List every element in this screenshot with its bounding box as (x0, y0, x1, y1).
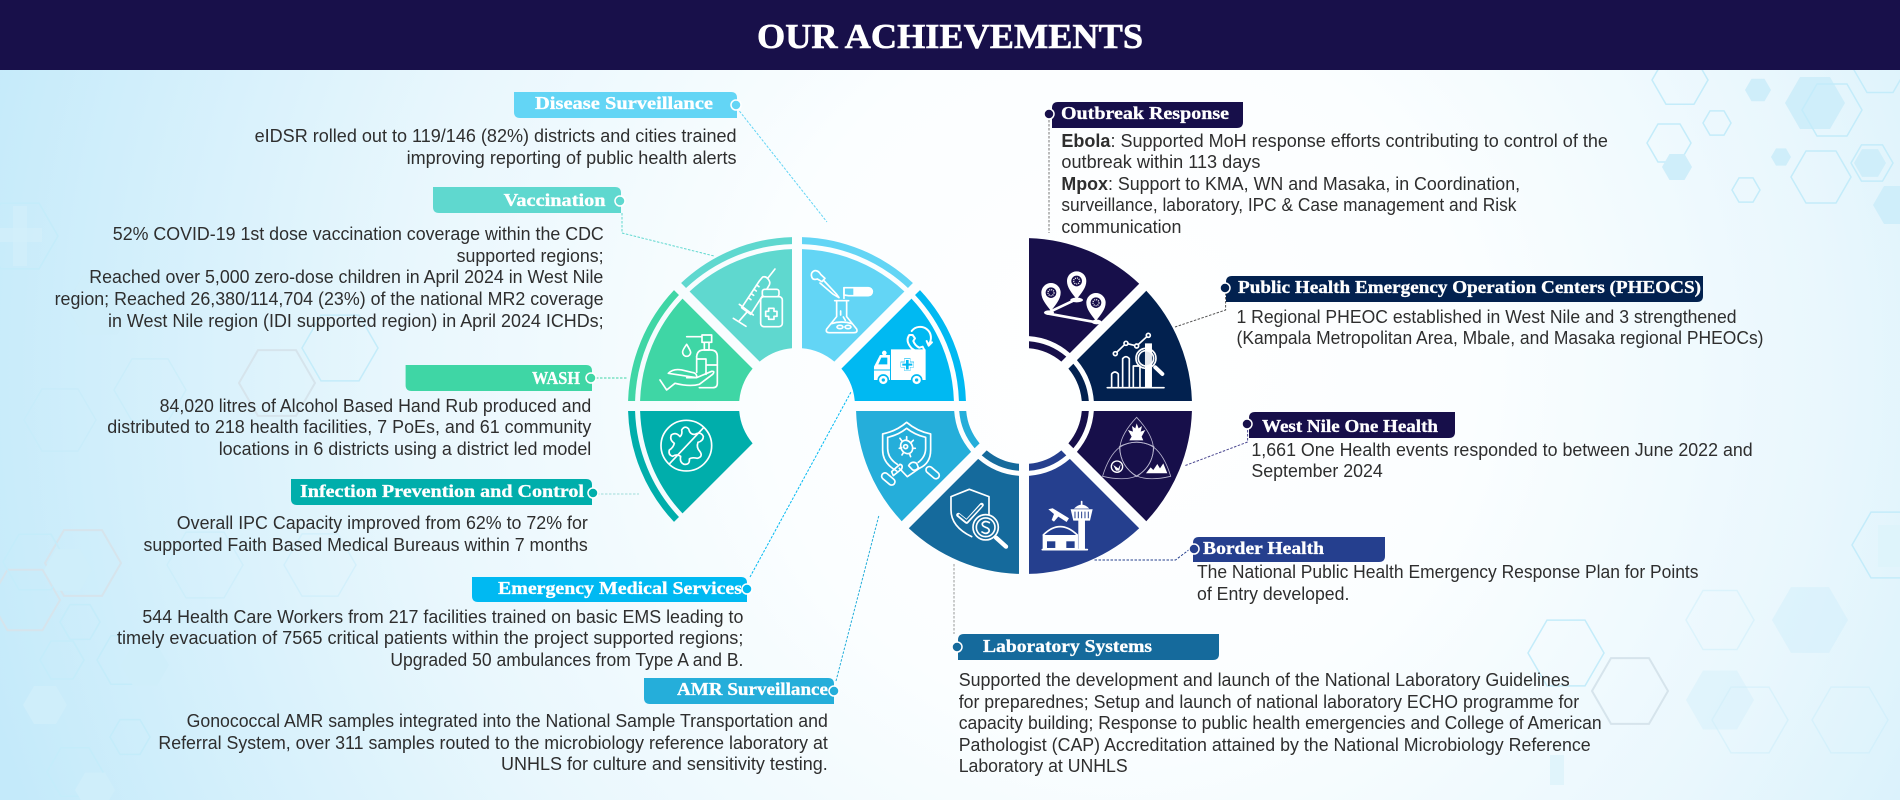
icon: flask and dropper (811, 271, 872, 333)
tag (406, 365, 596, 391)
segment: AMR surveillance (824, 362, 989, 521)
leader line (622, 213, 714, 256)
segment: outbreak response (1029, 238, 1139, 362)
tag (291, 479, 598, 505)
icon: shield check with magnifier (951, 489, 1006, 547)
text block: Referral System, over 311 samples routed to the microbiology reference laboratory at (158, 733, 828, 753)
text block (959, 670, 1602, 776)
text block (1061, 131, 1608, 237)
text block: improving reporting of public health alerts (407, 148, 737, 168)
text block: Reached over 5,000 zero-dose children in April 2024 in West Nile (89, 267, 603, 287)
icon: hand sanitiser (660, 335, 717, 390)
segment: disease surveillance (802, 237, 913, 362)
icon: outbreak location pins (1041, 271, 1106, 324)
text block: outbreak within 113 days (1061, 152, 1260, 172)
tag (952, 634, 1219, 660)
icon: bar chart with magnifier (1107, 333, 1164, 388)
panel: west nile one health (1184, 412, 1753, 481)
text block: Laboratory at UNHLS (959, 756, 1128, 776)
leader line (750, 392, 851, 577)
panel: emergency medical services (117, 392, 851, 670)
segment: emergency medical services (832, 290, 998, 451)
segment: vaccination (681, 205, 842, 371)
text block: 544 Health Care Workers from 217 facilities trained on basic EMS leading to (142, 607, 743, 627)
text block: 1 Regional PHEOC established in West Nile and 3 strengthened (1236, 307, 1736, 327)
text block: region; Reached 26,380/114,704 (23%) of the national MR2 coverage (55, 289, 604, 309)
tag: Laboratory Systems (983, 636, 1152, 656)
leader line (596, 377, 628, 379)
tag (1242, 412, 1455, 438)
tag (644, 678, 839, 704)
chart: right wheel (824, 238, 1224, 606)
text block: of Entry developed. (1197, 584, 1349, 604)
panel: public health emergency operation centers (1175, 276, 1764, 348)
icon: syringe and vial (733, 269, 782, 327)
text block: in West Nile region (IDI supported region) in April 2024 ICHDs; (108, 311, 604, 331)
text block: surveillance, laboratory, IPC & Case management and Risk (1061, 195, 1517, 215)
text block (1197, 562, 1698, 604)
leader line (1175, 293, 1226, 327)
text block: supported regions; (457, 246, 604, 266)
text block (255, 126, 737, 168)
leader line (1184, 430, 1248, 466)
title: OUR ACHIEVEMENTS (757, 17, 1143, 56)
text block: distributed to 218 health facilities, 7 PoEs, and 61 community (107, 417, 591, 437)
segment: border health (980, 441, 1139, 606)
segment: laboratory systems (909, 450, 1019, 574)
text block (117, 607, 743, 670)
text block: Gonococcal AMR samples integrated into the National Sample Transportation and (187, 711, 828, 731)
leader line (1048, 120, 1050, 233)
segment: WASH (628, 290, 753, 401)
icon: crossed-out virus (661, 420, 712, 471)
icon: one health triad (1094, 417, 1179, 491)
tag (1220, 276, 1703, 302)
text block: communication (1061, 217, 1181, 237)
tag: West Nile One Health (1262, 416, 1438, 436)
text block: supported Faith Based Medical Bureaus within 7 months (144, 535, 588, 555)
text block (158, 711, 828, 774)
text block: The National Public Health Emergency Response Plan for Points (1197, 562, 1698, 582)
panel: AMR surveillance (158, 515, 879, 774)
icon: shield, bacteria and pill chain (880, 422, 941, 486)
leader line (1094, 549, 1190, 560)
tag: Infection Prevention and Control (300, 481, 584, 501)
tag: Disease Surveillance (535, 93, 713, 113)
panel: border health (1094, 537, 1698, 604)
text block: Mpox: Support to KMA, WN and Masaka, in Coordination, (1061, 174, 1520, 194)
segment: infection prevention and control (596, 361, 762, 522)
icon: airport terminal, control tower and plane (1042, 502, 1093, 550)
panel: outbreak response (1044, 102, 1608, 237)
tag: WASH (532, 368, 580, 388)
panel: disease surveillance (255, 92, 827, 222)
icon: ambulance (874, 327, 932, 385)
text block (144, 513, 588, 555)
text block (1236, 307, 1764, 348)
tag (1044, 102, 1243, 128)
text block: locations in 6 districts using a district led model (219, 439, 591, 459)
text block: (Kampala Metropolitan Area, Mbale, and Masaka regional PHEOCs) (1236, 328, 1764, 348)
segment: public health emergency operation centers (1059, 291, 1224, 450)
leader line (836, 515, 879, 681)
panel: infection prevention and control (144, 479, 639, 555)
text block: timely evacuation of 7565 critical patients within the project supported regions; (117, 628, 743, 648)
tag: AMR Surveillance (677, 679, 828, 699)
leader line (953, 564, 955, 634)
segment: west nile one health (1068, 411, 1192, 521)
chart: left wheel (596, 205, 998, 522)
tag: Emergency Medical Services (498, 578, 742, 598)
text block (107, 396, 591, 459)
text block: Ebola: Supported MoH response efforts contributing to control of the (1061, 131, 1608, 151)
leader line (597, 493, 639, 495)
tag (472, 577, 752, 602)
text block: eIDSR rolled out to 119/146 (82%) districts and cities trained (255, 126, 737, 146)
tag: Public Health Emergency Operation Centers (PHEOCS) (1238, 277, 1701, 297)
text block: Overall IPC Capacity improved from 62% to 72% for (177, 513, 588, 533)
text block: 52% COVID-19 1st dose vaccination coverage within the CDC (113, 224, 604, 244)
tag (514, 92, 741, 118)
tag (433, 187, 625, 213)
tag (1189, 537, 1385, 562)
panel: vaccination (55, 187, 714, 331)
text block: September 2024 (1251, 461, 1383, 481)
leader line (737, 108, 827, 222)
tag: Border Health (1203, 538, 1324, 558)
text block: 1,661 One Health events responded to between June 2022 and (1251, 440, 1753, 460)
text block: Supported the development and launch of the National Laboratory Guidelines (959, 670, 1570, 690)
text block: Upgraded 50 ambulances from Type A and B. (390, 650, 743, 670)
tag: Outbreak Response (1061, 103, 1229, 123)
text block: capacity building; Response to public health emergencies and College of American (959, 713, 1602, 733)
text block (55, 224, 604, 331)
text block: UNHLS for culture and sensitivity testing. (501, 754, 828, 774)
text block: 84,020 litres of Alcohol Based Hand Rub produced and (160, 396, 591, 416)
tag: Vaccination (504, 190, 606, 210)
title bar (0, 0, 1900, 70)
text block: Pathologist (CAP) Accreditation attained by the National Microbiology Reference (959, 735, 1591, 755)
text block: for preparednes; Setup and launch of national laboratory ECHO programme for (959, 692, 1579, 712)
panel: WASH (107, 365, 628, 459)
text block (1251, 440, 1753, 481)
panel: laboratory systems (952, 564, 1602, 776)
